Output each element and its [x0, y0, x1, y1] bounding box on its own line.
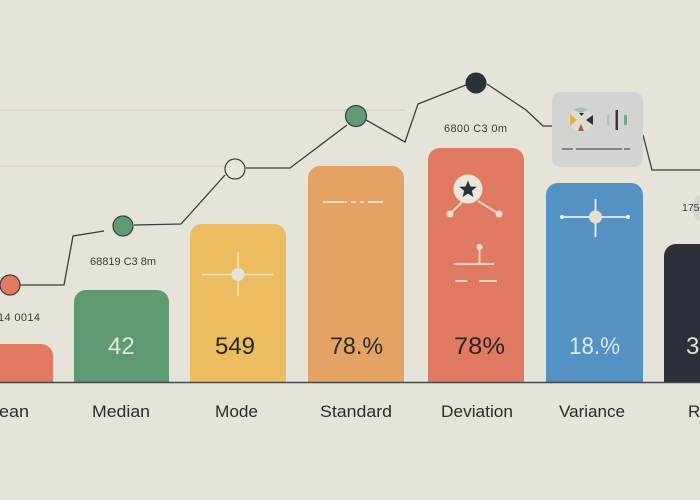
trend line: [18, 84, 700, 285]
marker: mean: [0, 275, 20, 295]
bar: median: [74, 290, 169, 382]
icon: pin and dashes: [454, 244, 497, 281]
value: mode: 549: [215, 333, 255, 360]
bar: deviation: [428, 148, 524, 382]
bar: mean: [0, 344, 53, 382]
icon: mode crosshair: [202, 252, 273, 296]
grey disc behind right label: [692, 193, 700, 223]
label: mode: Mode: [215, 402, 258, 421]
marker: median: [113, 216, 133, 236]
icon: star node: [446, 174, 502, 218]
value: median: 42: [108, 333, 135, 360]
bar: mode: [190, 224, 286, 382]
value: deviation: 78%: [454, 333, 505, 360]
annotation: median: 68819 C3 8m: [90, 256, 156, 268]
gridlines: [0, 110, 405, 166]
callout card: chart glyphs: [552, 92, 643, 167]
label: standard: Standard: [320, 402, 392, 421]
bar: standard: [308, 166, 404, 382]
annotation: deviation: 6800 C3 0m: [444, 123, 507, 135]
icon: mini bars: [607, 110, 627, 130]
value: range: 3: [686, 333, 699, 360]
icon: wheel: [570, 107, 593, 132]
marker: standard: [346, 106, 366, 126]
icon: variance crosshair: [560, 199, 630, 237]
bar: range: [664, 244, 700, 382]
icon: standard dashes: [323, 201, 383, 203]
value: variance: 18.%: [569, 333, 620, 360]
label: variance: Variance: [559, 402, 625, 421]
bar: variance: [546, 183, 643, 382]
marker: deviation: [466, 72, 486, 94]
card dashes: [562, 148, 630, 150]
value: standard: 78.%: [330, 333, 383, 360]
label: deviation: Deviation: [441, 402, 513, 421]
baseline: [0, 382, 700, 384]
label: median: Median: [92, 402, 150, 421]
marker: mode: [225, 159, 245, 179]
